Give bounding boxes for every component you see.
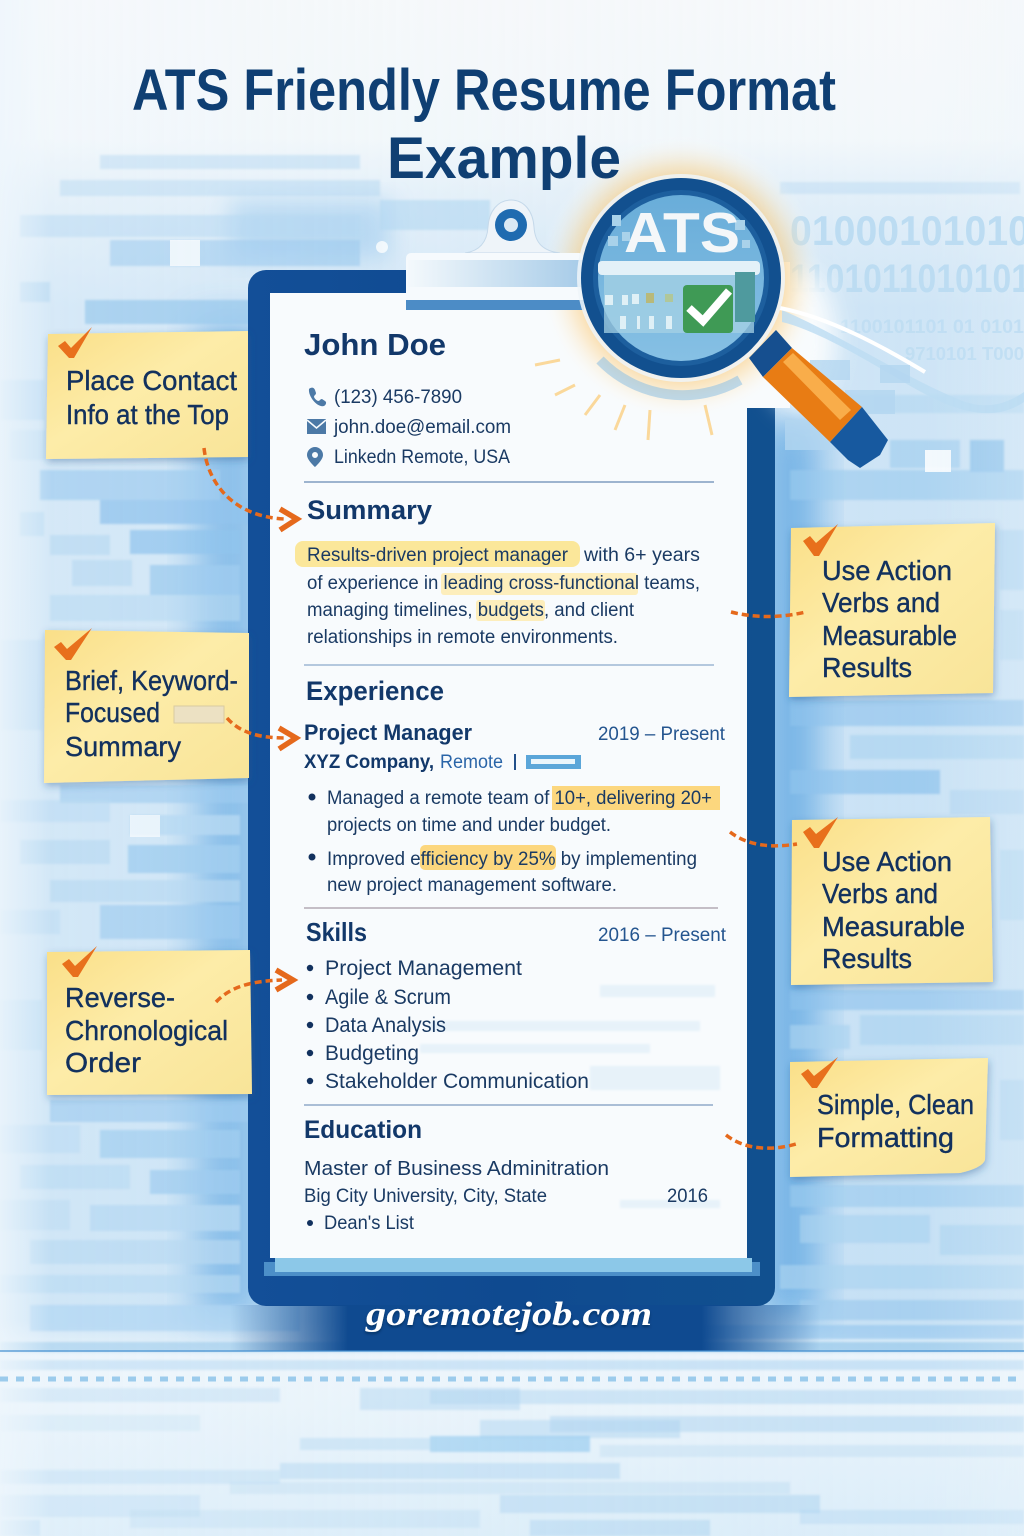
experience bullets xyxy=(308,788,712,896)
note: action verbs 1: Results xyxy=(822,652,912,683)
note: chronological: Reverse- xyxy=(65,982,175,1013)
summary text: relationships in remote environments. xyxy=(307,627,618,648)
experience bullets: Improved efficiency by 25% by implementing xyxy=(327,849,697,870)
skills list: Stakeholder Communication xyxy=(325,1070,589,1093)
arrow: contact to summary xyxy=(204,448,297,530)
check mark xyxy=(801,1057,838,1088)
honors: Dean's List xyxy=(324,1213,415,1234)
note: action verbs 1: Use Action xyxy=(822,555,952,586)
note: action verbs 1 xyxy=(789,523,995,697)
note: chronological xyxy=(47,946,252,1095)
handle collar xyxy=(749,330,792,377)
title: Example xyxy=(387,126,621,191)
connector: formatting xyxy=(726,1135,796,1148)
skills list: Data Analysis xyxy=(325,1014,446,1037)
orange sun glow xyxy=(539,136,823,420)
check mark xyxy=(803,817,838,848)
skills list: Agile & Scrum xyxy=(325,986,451,1009)
phone number: (123) 456-7890 xyxy=(334,387,462,408)
binary digits: 1100101101 01 0101 xyxy=(840,317,1024,338)
sun rays xyxy=(535,360,712,440)
email: john.doe@email.com xyxy=(333,417,511,438)
connector: action verbs 2 xyxy=(730,832,797,846)
note: contact info xyxy=(46,327,248,459)
orange handle xyxy=(763,348,862,442)
experience bullets: new project management software. xyxy=(327,875,617,896)
website: goremotejob.com xyxy=(365,1296,652,1333)
skills dates: 2016 – Present xyxy=(598,925,727,946)
magnifying glass xyxy=(577,174,888,468)
summary text: managing timelines, budgets, and client xyxy=(307,600,635,621)
ring xyxy=(577,174,785,382)
check mark xyxy=(803,524,838,556)
skills list: Budgeting xyxy=(325,1042,419,1065)
note: action verbs 1: Verbs and xyxy=(822,587,940,618)
white corner behind magnifier xyxy=(560,262,836,410)
experience bullets: Managed a remote team of 10+, delivering 20+ xyxy=(327,788,712,809)
ATS lens label: ATS xyxy=(624,201,740,265)
footer banner xyxy=(0,1296,1024,1352)
note: summary xyxy=(44,628,249,783)
note: clean formatting xyxy=(790,1057,988,1177)
experience highlights xyxy=(420,786,720,870)
summary heading: Summary xyxy=(307,495,432,525)
note: chronological: Order xyxy=(65,1047,141,1078)
graduation year: 2016 xyxy=(667,1186,708,1207)
experience bullets: projects on time and under budget. xyxy=(327,815,611,836)
note: contact info: Info at the Top xyxy=(66,399,229,430)
binary digits xyxy=(790,207,1024,364)
university: Big City University, City, State xyxy=(304,1186,547,1207)
check mark xyxy=(58,327,92,358)
binary digits: 9710101 T000 xyxy=(905,344,1024,364)
summary text xyxy=(307,545,700,648)
skills list xyxy=(307,957,589,1093)
note: chronological: Chronological xyxy=(65,1015,228,1046)
summary text: of experience in leading cross-functional teams, xyxy=(307,573,700,594)
note: clean formatting: Formatting xyxy=(817,1122,954,1153)
skills heading: Skills xyxy=(306,917,367,947)
note: action verbs 1: Measurable xyxy=(822,620,957,651)
arrow: keyword to experience xyxy=(227,718,296,749)
clipboard xyxy=(248,270,775,1306)
summary text: Results-driven project manager xyxy=(307,545,569,566)
education heading: Education xyxy=(304,1116,422,1144)
check mark xyxy=(62,946,97,977)
note: action verbs 2 xyxy=(791,817,993,985)
note: summary: Summary xyxy=(65,731,181,762)
paper sheet xyxy=(270,293,747,1258)
experience heading: Experience xyxy=(306,676,444,706)
job dates: 2019 – Present xyxy=(598,724,726,745)
check mark xyxy=(54,628,92,660)
dotted strip xyxy=(0,1376,1024,1382)
title xyxy=(132,58,836,191)
note: summary: Focused xyxy=(65,697,160,728)
company: XYZ Company, xyxy=(304,752,434,773)
resume text xyxy=(295,327,727,1234)
note: action verbs 2: Results xyxy=(822,943,912,974)
summary highlights xyxy=(295,541,638,621)
note: clean formatting: Simple, Clean xyxy=(817,1089,974,1120)
arc under lens xyxy=(600,360,740,395)
name: John Doe xyxy=(304,327,446,362)
degree: Master of Business Adminitration xyxy=(304,1157,609,1180)
swoosh and pixel blocks by handle xyxy=(780,308,1024,450)
icon: phone xyxy=(309,388,326,406)
icon: envelope xyxy=(307,419,326,434)
skills list: Project Management xyxy=(325,957,522,980)
icon: location pin xyxy=(307,447,323,467)
connector: action verbs 1 xyxy=(731,612,806,616)
job title: Project Manager xyxy=(304,720,472,745)
faint streaks on paper xyxy=(420,985,720,1208)
arrow: order to skills xyxy=(216,970,293,1002)
location: Linkedn Remote, USA xyxy=(334,447,510,468)
note: summary: Brief, Keyword- xyxy=(65,665,238,696)
note: action verbs 2: Verbs and xyxy=(822,878,938,909)
clipboard clip xyxy=(406,200,584,310)
company location: Remote xyxy=(440,752,503,773)
note: action verbs 2: Use Action xyxy=(822,846,952,877)
separator and badge xyxy=(514,754,581,770)
handle tip xyxy=(830,407,888,468)
note: action verbs 2: Measurable xyxy=(822,911,965,942)
lens xyxy=(598,195,764,361)
scribbled patch xyxy=(174,706,224,723)
title: ATS Friendly Resume Format xyxy=(132,58,836,123)
summary text: with 6+ years xyxy=(583,545,700,566)
note: contact info: Place Contact xyxy=(66,365,237,396)
